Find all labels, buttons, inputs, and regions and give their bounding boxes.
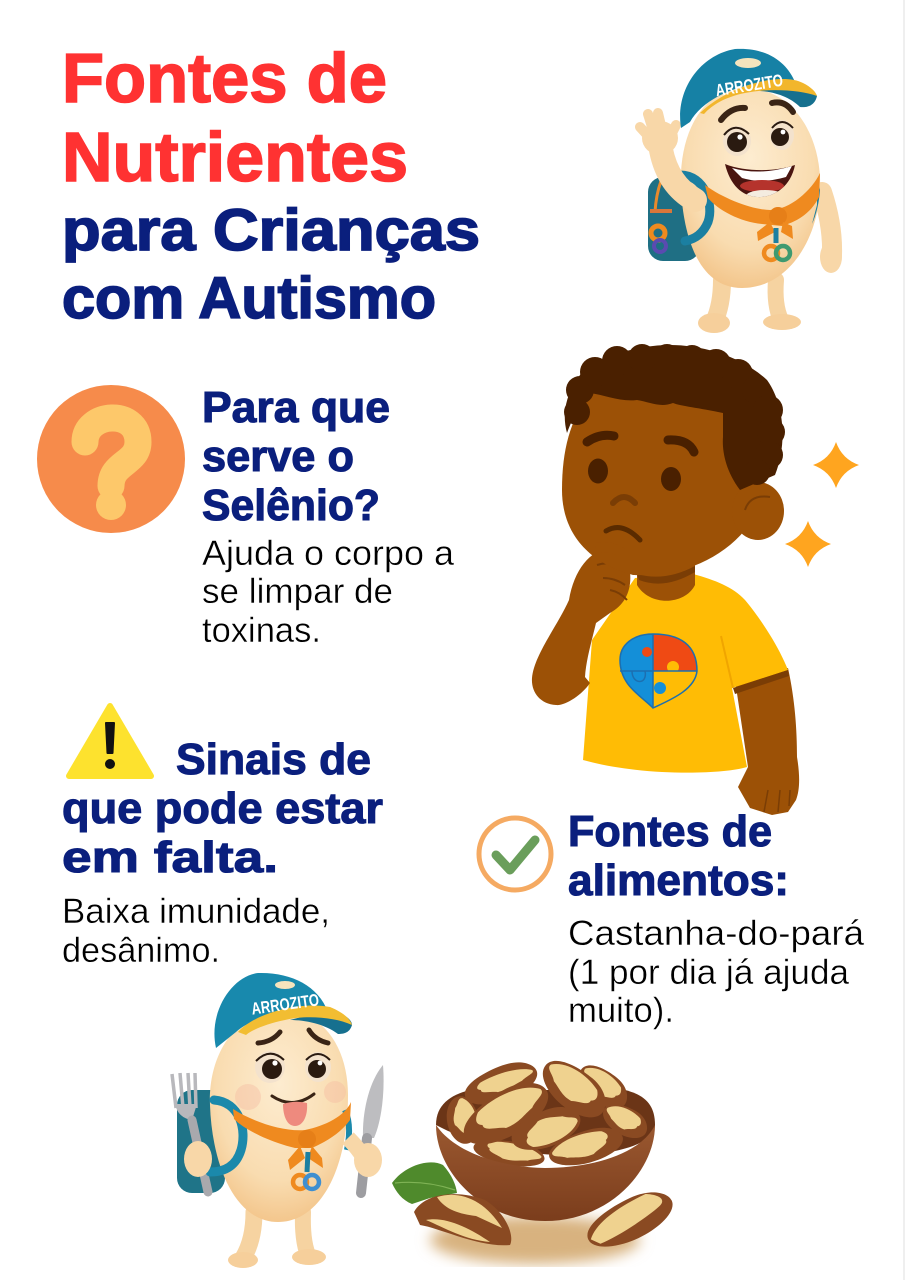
heading: para que serve [202, 383, 390, 530]
icon: sparkles [785, 442, 859, 567]
icon: puzzle heart [620, 634, 697, 708]
title: para Crianças [62, 198, 480, 263]
illustration: bowl of brazil nuts [392, 1050, 680, 1264]
text: selenium benefit: Ajuda o corpo a [202, 534, 455, 573]
title: Nutrientes [62, 118, 408, 196]
icon: check circle [479, 818, 551, 890]
mascot: waving Arrozito: ARROZITO [714, 71, 784, 100]
mascot: waving Arrozito [640, 49, 842, 333]
panel: fontes de alimentos [479, 807, 865, 1030]
heading: sinais de falta [62, 735, 383, 882]
text: signs: Baixa imunidade, [62, 892, 330, 931]
heading: sinais de falta: que pode estar [62, 784, 383, 833]
heading: para que serve: serve o [202, 432, 354, 481]
hair [564, 344, 785, 490]
mascot: hungry Arrozito with fork and knife: ARROZITO [250, 990, 320, 1019]
panel: sinais de falta [62, 706, 383, 970]
text: selenium benefit [202, 534, 455, 650]
text: selenium benefit: se limpar de [202, 572, 393, 611]
illustration: thinking boy [532, 344, 799, 815]
text: food sources: muito). [568, 991, 674, 1030]
heading: fontes de alimentos [568, 807, 789, 905]
heading: fontes de alimentos: alimentos: [568, 856, 789, 905]
icon: warning triangle [69, 706, 151, 776]
text: food sources: (1 por dia já ajuda [568, 953, 850, 992]
heading: sinais de falta: Sinais de [176, 735, 371, 784]
panel: para que serve o selênio [37, 383, 455, 650]
heading: para que serve: Para que [202, 383, 390, 432]
text: food sources: Castanha-do-pará [568, 914, 865, 953]
text: selenium benefit: toxinas. [202, 611, 321, 650]
text: signs: desânimo. [62, 931, 220, 970]
text: food sources [568, 914, 865, 1030]
title: Fontes de [62, 39, 387, 117]
title [62, 39, 480, 331]
heading: para que serve: Selênio? [202, 481, 380, 530]
heading: sinais de falta: em falta. [62, 833, 278, 882]
title: com Autismo [62, 266, 436, 331]
heading: fontes de alimentos: Fontes de [568, 807, 772, 856]
text: signs [62, 892, 330, 970]
icon: question mark circle [37, 385, 185, 533]
mascot: hungry Arrozito with fork and knife [172, 973, 384, 1268]
